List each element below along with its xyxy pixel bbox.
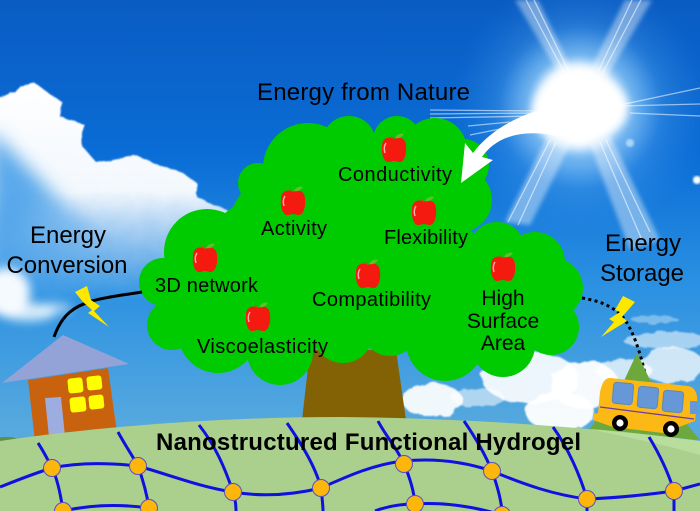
property labels [155, 164, 539, 358]
property labels: Compatibility [312, 289, 431, 311]
label: Energy Conversion: Energy [30, 222, 106, 249]
pine tree behind bus [589, 353, 700, 440]
icon: lightning right [601, 296, 635, 337]
property labels: Viscoelasticity [197, 336, 328, 358]
shrub at left edge [0, 437, 20, 445]
cloud: lower right [402, 316, 700, 432]
title: Energy from Nature: Energy from Nature [257, 79, 470, 106]
cloud: right edge glint [693, 176, 700, 184]
cloud: upper left [0, 82, 240, 310]
property labels: 3D network [155, 275, 259, 297]
property labels: Flexibility [384, 227, 468, 249]
ground hill [0, 417, 700, 511]
label: Energy Storage [600, 230, 684, 287]
property labels: Conductivity [338, 164, 452, 186]
arrow: sun to tree [461, 108, 558, 183]
tree canopy [139, 116, 583, 385]
house door [45, 397, 66, 447]
bus [593, 378, 698, 437]
property labels: High [481, 287, 525, 310]
property labels: Area [481, 332, 525, 355]
house window [67, 375, 105, 413]
tree trunk [302, 350, 406, 420]
house roof [2, 335, 129, 383]
apples [193, 134, 515, 331]
house [2, 335, 129, 450]
connector: tree to bus [582, 298, 646, 378]
connector: house to tree [54, 292, 142, 337]
heading: Nanostructured Functional Hydrogel: Nanostructured Functional Hydrogel [156, 429, 581, 456]
label: Energy Conversion [6, 222, 128, 279]
icon: lightning left [75, 286, 109, 327]
cloud: lower left [0, 268, 72, 321]
property labels: Activity [261, 218, 327, 240]
sun [430, 0, 700, 250]
label: Energy Conversion: Conversion [6, 252, 128, 279]
hydrogel network [0, 421, 700, 511]
house walls [28, 368, 118, 450]
label: Energy Storage: Energy [605, 230, 681, 257]
property labels: Surface [467, 310, 539, 333]
label: Energy Storage: Storage [600, 260, 684, 287]
